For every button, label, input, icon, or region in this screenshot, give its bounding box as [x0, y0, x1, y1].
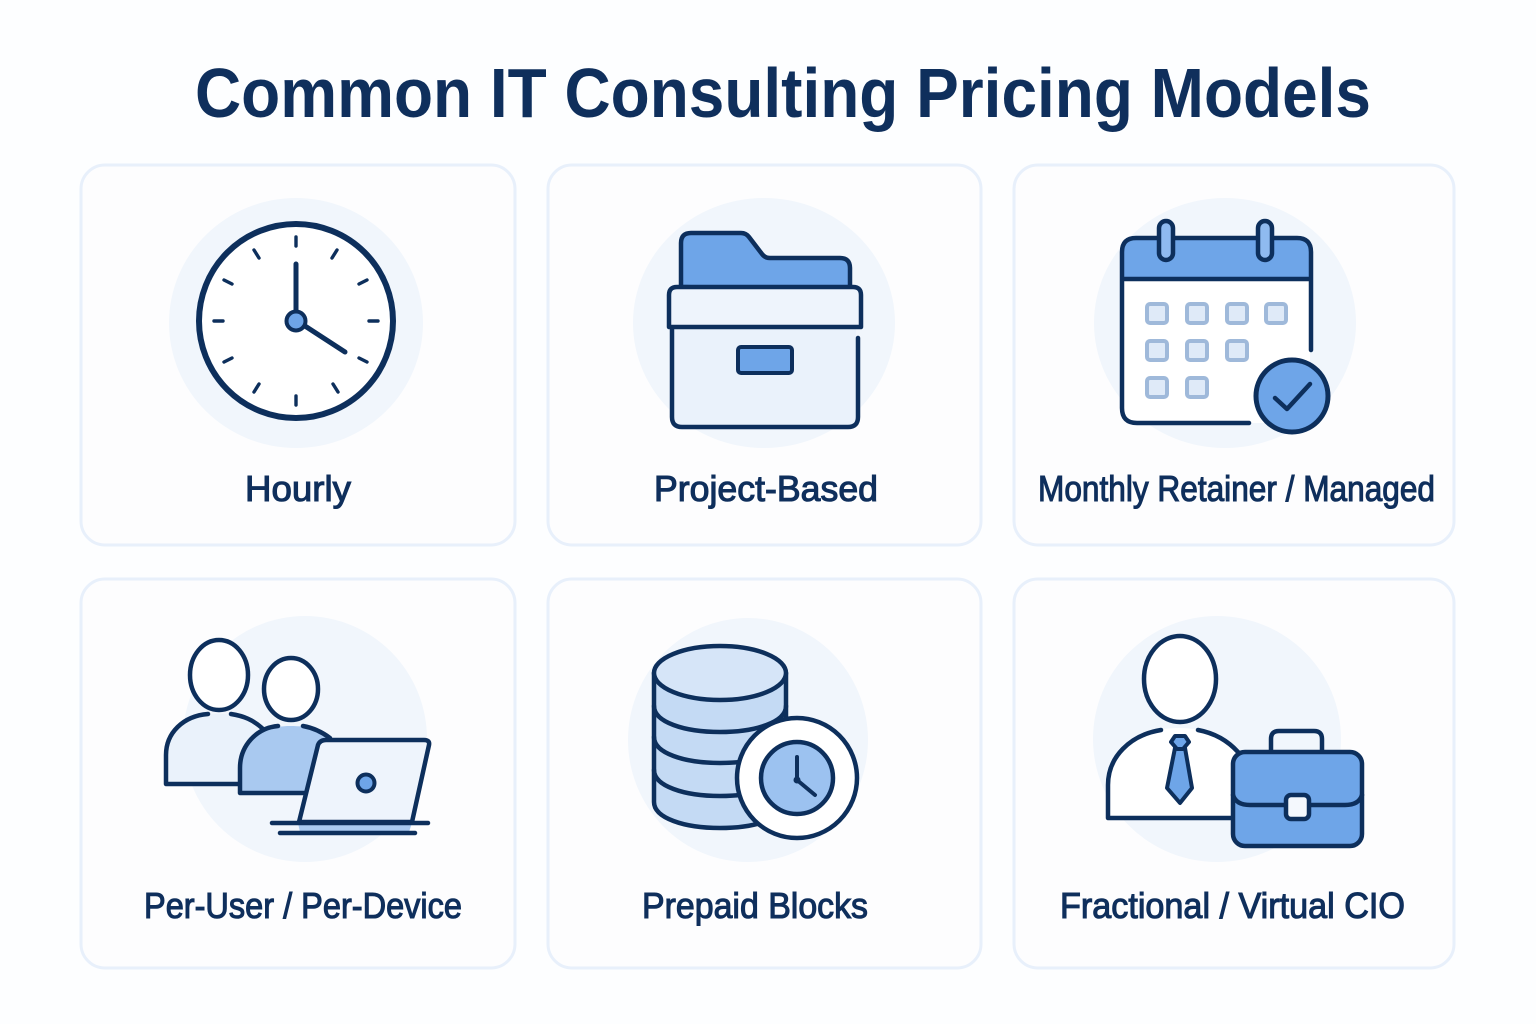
panel: monthly retainer — [1014, 165, 1454, 545]
icon: calendar with check — [1094, 198, 1356, 448]
label: prepaid blocks: Prepaid Blocks — [642, 885, 868, 926]
icon: file box with folder — [633, 198, 895, 448]
icon: executive with briefcase — [1093, 616, 1362, 862]
label: monthly retainer / managed: Monthly Retainer / Managed — [1038, 468, 1435, 509]
icon: clock — [169, 198, 423, 448]
label: fractional / virtual cio: Fractional / Virtual CIO — [1060, 885, 1405, 926]
icon: database with clock — [628, 618, 868, 862]
panel: fractional cio — [1014, 579, 1454, 968]
icon: users with laptop — [166, 616, 429, 862]
label: per-user / per-device: Per-User / Per-Device — [144, 885, 462, 926]
panel: prepaid blocks — [548, 579, 981, 968]
panel: per-user — [81, 579, 515, 968]
title: Common IT Consulting Pricing Models — [195, 54, 1371, 132]
panel: project-based — [548, 165, 981, 545]
label: hourly: Hourly — [245, 468, 351, 509]
panel: hourly — [81, 165, 515, 545]
label: project-based: Project-Based — [654, 468, 878, 509]
